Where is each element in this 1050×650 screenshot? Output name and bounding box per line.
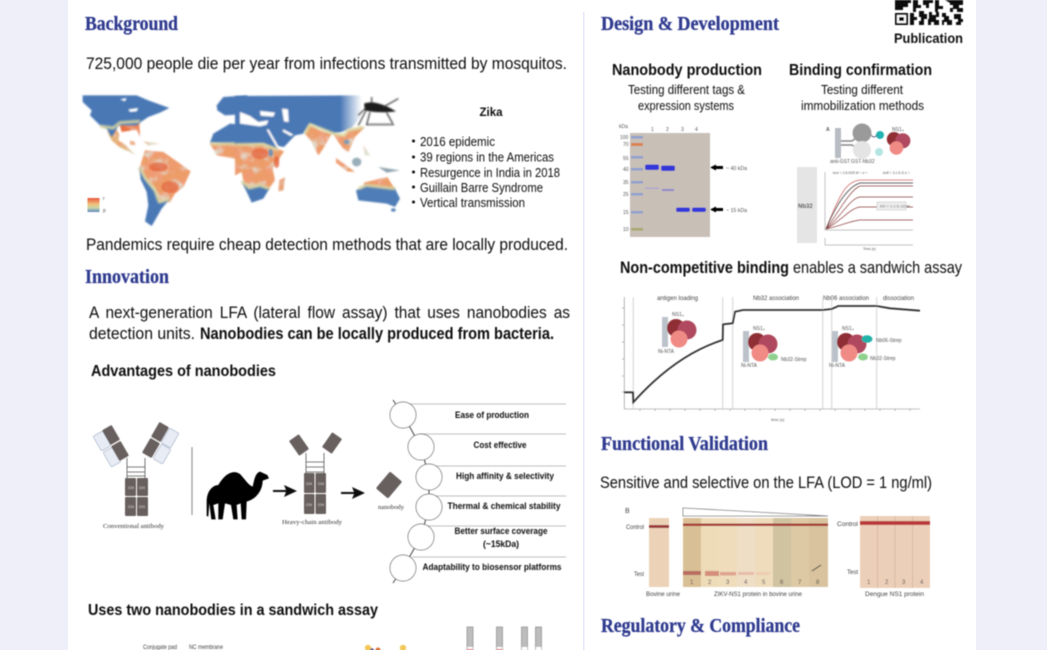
heavy-chain antibody: CH bbox=[306, 502, 312, 507]
advantages list: Better surface coverage bbox=[454, 526, 548, 536]
binding schematic: A bbox=[826, 127, 830, 133]
Zika facts list: Zika bbox=[479, 107, 503, 119]
dengue NS1 strips bbox=[837, 516, 930, 598]
Zika facts list: Guillain Barre Syndrome bbox=[420, 181, 543, 195]
heading: Regulatory & Compliance: Regulatory & Compliance bbox=[601, 616, 800, 637]
advantages list: Cost effective bbox=[474, 440, 526, 450]
ZIKV-NS1 strips: 1 bbox=[690, 580, 694, 586]
Zika facts list: Vertical transmission bbox=[420, 196, 525, 210]
binding schematic: NS1₄ bbox=[892, 127, 904, 133]
innovation paragraph: Nanobodies can be locally produced from bacteria. bbox=[200, 324, 554, 343]
bovine urine strip bbox=[646, 518, 681, 598]
subheading: binding confirmation bbox=[789, 62, 932, 113]
heading: Background: Background bbox=[85, 14, 178, 35]
advantages list: Ease of production bbox=[455, 410, 529, 420]
subheading: nanobody production: Testing different tags & bbox=[628, 83, 746, 97]
statement: non-competitive binding: enables a sandwich assay bbox=[793, 258, 962, 277]
subheading: binding confirmation: immobilization methods bbox=[801, 99, 924, 113]
subheading: binding confirmation: Testing different bbox=[821, 83, 903, 97]
LFA strips panel: Test bbox=[634, 572, 644, 578]
innovation paragraph: A next-generation LFA (lateral flow assay) that uses nanobodies as bbox=[89, 303, 570, 322]
nanobody: nanobody bbox=[378, 504, 405, 511]
sensorgram chart: time (s) bbox=[771, 417, 785, 422]
Nb06 and Nb32 association schematic: Ni-NTA bbox=[829, 363, 846, 369]
heavy-chain antibody: CH bbox=[318, 502, 324, 507]
dengue NS1 strips: 3 bbox=[902, 580, 906, 586]
subheading: sandwich assay: Uses two nanobodies in a sandwich assay bbox=[88, 602, 378, 619]
antigen loading schematic: Ni-NTA bbox=[658, 349, 675, 355]
Nb06 and Nb32 association schematic bbox=[829, 326, 902, 369]
vertical divider bbox=[192, 447, 193, 515]
arrow: heavy-chain to nanobody bbox=[341, 487, 365, 499]
arrow: camel to heavy-chain bbox=[273, 485, 297, 497]
advantages list: Adaptability to biosensor platforms bbox=[422, 562, 562, 572]
map legend: r bbox=[103, 196, 105, 202]
subheading: nanobody production: Nanobody production bbox=[612, 62, 762, 79]
sensorgram chart: antigen loading bbox=[657, 296, 698, 302]
map legend: p bbox=[103, 208, 106, 214]
bovine urine strip: Bovine urine bbox=[646, 592, 681, 598]
Zika facts list: Resurgence in India in 2018 bbox=[420, 166, 560, 180]
conventional antibody: CH bbox=[139, 485, 145, 490]
Nb06 and Nb32 association schematic: Nb06-Strep bbox=[876, 338, 902, 344]
concentration wedge bbox=[683, 508, 828, 516]
Nb32 association schematic: NS1₄ bbox=[753, 326, 765, 332]
LFA strips panel bbox=[625, 508, 930, 598]
dengue NS1 strips: 4 bbox=[920, 580, 924, 586]
SDS-PAGE gel: 25 bbox=[623, 192, 629, 198]
conventional antibody: CH bbox=[139, 504, 145, 509]
advantages list bbox=[390, 400, 566, 583]
antigen loading schematic: NS1₄ bbox=[672, 312, 684, 318]
heavy-chain antibody: CH bbox=[306, 481, 312, 486]
SDS-PAGE gel: 70 bbox=[623, 142, 629, 148]
conventional antibody: CH bbox=[128, 504, 134, 509]
SDS-PAGE gel: 4 bbox=[695, 127, 698, 133]
binding kinetics chart: kon = 2.8 E05 M⁻¹ s⁻¹ bbox=[833, 171, 868, 175]
map: Americas and West Africa bbox=[83, 95, 247, 226]
heavy-chain antibody: CH bbox=[318, 481, 324, 486]
sandwich assay diagram, cropped bbox=[143, 627, 542, 650]
statement: mosquito deaths: 725,000 people die per year from infections transmitted by mosquitos. bbox=[86, 54, 567, 73]
heavy-chain antibody: Heavy-chain antibody bbox=[282, 519, 343, 526]
advantages list: High affinity & selectivity bbox=[456, 471, 554, 481]
binding kinetics chart bbox=[797, 167, 913, 251]
dengue NS1 strips: 2 bbox=[885, 580, 889, 586]
LFA strips panel: Control bbox=[626, 525, 644, 531]
Zika facts list: 39 regions in the Americas bbox=[420, 150, 554, 164]
world map with mosquito bbox=[83, 95, 400, 226]
heavy-chain antibody bbox=[282, 432, 343, 526]
innovation paragraph: detection units. bbox=[89, 324, 195, 343]
statement: non-competitive binding bbox=[620, 258, 962, 277]
ZIKV-NS1 strips bbox=[683, 518, 828, 598]
heading: Functional Validation: Functional Validation bbox=[601, 434, 768, 455]
LFA strips panel: B bbox=[625, 508, 630, 515]
advantages list: Thermal & chemical stability bbox=[448, 501, 560, 511]
QR code, cropped bbox=[895, 0, 963, 25]
dengue NS1 strips: Dengue NS1 protein bbox=[865, 592, 924, 598]
conventional antibody bbox=[93, 422, 179, 530]
sensorgram chart: Nb32 association bbox=[753, 296, 799, 302]
conventional antibody: CH bbox=[128, 485, 134, 490]
Nb32 association schematic: Nb32-Strep bbox=[781, 357, 807, 363]
Nb32 association schematic: Ni-NTA bbox=[741, 363, 758, 369]
dengue NS1 strips: 1 bbox=[867, 580, 871, 586]
map legend bbox=[88, 196, 106, 214]
sensorgram chart: dissociation bbox=[883, 296, 914, 302]
subheading: nanobody production: expression systems bbox=[638, 99, 734, 113]
label: Publication: Publication bbox=[894, 30, 963, 46]
dengue NS1 strips: Test bbox=[847, 570, 858, 576]
ZIKV-NS1 strips: 6 bbox=[780, 580, 784, 586]
heading: Design & Development: Design & Development bbox=[601, 14, 779, 35]
Zika facts list bbox=[412, 107, 560, 210]
Zika facts list: 2016 epidemic bbox=[420, 135, 495, 149]
ZIKV-NS1 strips: 3 bbox=[726, 580, 730, 586]
circle chain bbox=[390, 400, 566, 583]
subheading: nanobody production bbox=[612, 62, 762, 113]
innovation paragraph bbox=[89, 303, 570, 343]
icon: camel bbox=[207, 472, 269, 519]
SDS-PAGE gel: 40 bbox=[623, 167, 629, 173]
advantages list: (~15kDa) bbox=[483, 539, 519, 549]
ZIKV-NS1 strips: 8 bbox=[816, 580, 820, 586]
nanobody bbox=[376, 471, 405, 511]
binding kinetics chart: Nb32 bbox=[798, 204, 813, 210]
statement: sensitivity: Sensitive and selective on the LFA (LOD = 1 ng/ml) bbox=[600, 473, 932, 492]
SDS-PAGE gel: 35 bbox=[623, 180, 629, 186]
Nb32 association schematic bbox=[741, 326, 807, 369]
ZIKV-NS1 strips: 2 bbox=[708, 580, 712, 586]
SDS-PAGE gel: ~ 40 kDa bbox=[726, 166, 747, 172]
SDS-PAGE gel: 1 bbox=[651, 127, 654, 133]
binding kinetics chart: Time (s) bbox=[863, 247, 876, 251]
antigen loading schematic bbox=[658, 312, 696, 355]
statement: pandemics: Pandemics require cheap detection methods that are locally produced. bbox=[86, 235, 568, 254]
Nb06 and Nb32 association schematic: Nb32-Strep bbox=[870, 356, 896, 362]
binding kinetics chart: KD = 1.1 E-10 M bbox=[880, 204, 910, 208]
SDS-PAGE gel: 15 bbox=[623, 210, 629, 216]
sensorgram chart bbox=[622, 296, 920, 422]
SDS-PAGE gel: 3 bbox=[681, 127, 684, 133]
subheading: advantages: Advantages of nanobodies bbox=[91, 363, 276, 380]
Nb06 and Nb32 association schematic: NS1₄ bbox=[842, 326, 854, 332]
dengue NS1 strips: Control bbox=[837, 522, 858, 528]
icon: mosquito bbox=[358, 97, 398, 125]
SDS-PAGE gel bbox=[619, 124, 747, 237]
heading: Innovation: Innovation bbox=[85, 267, 169, 288]
ZIKV-NS1 strips: ZIKV-NS1 protein in bovine urine bbox=[714, 592, 803, 598]
SDS-PAGE gel: 2 bbox=[666, 127, 669, 133]
binding schematic: GST-Nb32 bbox=[851, 159, 875, 165]
binding schematic bbox=[826, 124, 910, 165]
binding kinetics chart: koff = 3.1 E-5 s⁻¹ bbox=[883, 171, 910, 175]
subheading: binding confirmation: Binding confirmation bbox=[789, 62, 932, 79]
SDS-PAGE gel: ~ 15 kDa bbox=[726, 208, 747, 214]
conventional antibody: Conventional antibody bbox=[103, 523, 165, 530]
SDS-PAGE gel: 100 bbox=[620, 135, 629, 141]
SDS-PAGE gel: 55 bbox=[623, 156, 629, 162]
ZIKV-NS1 strips: 7 bbox=[798, 580, 802, 586]
SDS-PAGE gel: kDa bbox=[619, 124, 628, 130]
ZIKV-NS1 strips: 4 bbox=[744, 580, 748, 586]
ZIKV-NS1 strips: 5 bbox=[762, 580, 766, 586]
SDS-PAGE gel: 10 bbox=[623, 227, 629, 233]
binding schematic: anti-GST bbox=[830, 159, 850, 165]
map: Eurasia, Africa and Australia bbox=[235, 95, 400, 212]
statement: non-competitive binding: Non-competitive binding bbox=[620, 258, 789, 277]
sensorgram chart: Nb06 association bbox=[823, 296, 869, 302]
antibody to nanobody diagram bbox=[93, 422, 405, 530]
